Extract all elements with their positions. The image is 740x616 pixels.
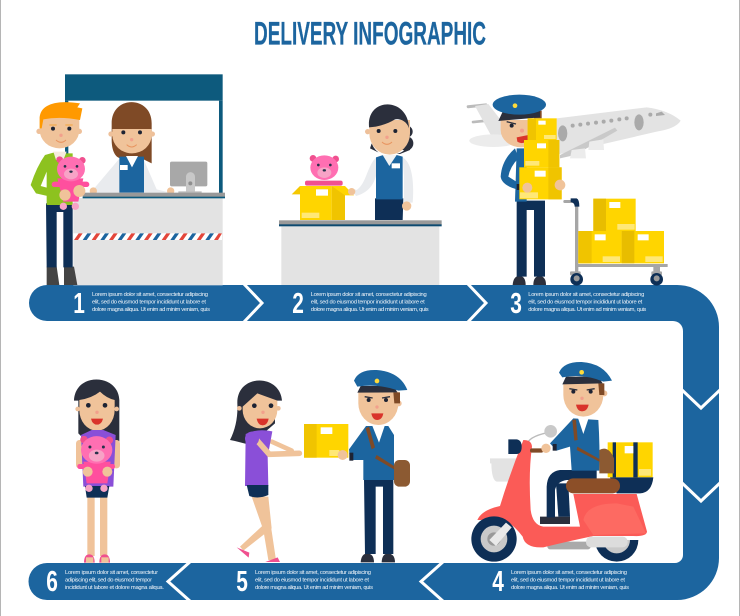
step 6 label: adipiscing elit, sed do eiusmod tempor [65,578,152,584]
step 6 label: incididunt ut labore et dolore magna aliqua. [65,585,164,591]
carried boxes [519,118,565,199]
step 6 label: Lorem ipsum dolor sit amet, consectetur [65,570,158,576]
step 4 label [492,566,629,598]
teddy bear [52,156,89,210]
courier [493,95,546,285]
luggage trolley [563,198,668,286]
teddy bear [77,436,115,492]
step 3 label: elit, sed do eiusmod tempor incididunt ut labore et [528,300,643,306]
step 1 label [73,288,210,320]
front wheel [471,516,517,562]
step 1 label: Lorem ipsum dolor sit amet, consectetur adipiscing [92,292,208,298]
clerk [348,104,413,220]
scene 5: courier handing parcel to woman [230,370,410,562]
step 1 label: elit, sed do eiusmod tempor incididunt ut labore et [92,300,206,306]
step 2 label: elit, sed do eiusmod tempor incididunt ut labore et [311,300,425,306]
woman receiving [230,380,299,562]
airplane [467,103,681,158]
step 5 label: 5 [236,566,248,598]
scene 1: customer at post office counter [31,74,225,285]
step 6 label: 6 [46,566,58,598]
step 4 label: dolore magna aliqua. Ut enim ad minim veniam, quis [511,585,629,591]
step 3 label: 3 [510,288,522,320]
step 4 label: Lorem ipsum dolor sit amet, consectetur adipiscing [511,570,627,576]
basket [490,458,518,482]
scene 4: courier on scooter [471,362,653,562]
step 4 label: elit, sed do eiusmod tempor incididunt ut labore et [511,578,625,584]
monitor [170,162,207,193]
open parcel box [292,186,354,220]
step 6 label [46,566,164,598]
step 5 label: elit, sed do eiusmod tempor incididunt ut labore et [255,578,369,584]
step 2 label: 2 [292,288,304,320]
step 1 label: dolore magna aliqua. Ut enim ad minim veniam, quis [92,307,210,313]
scene 3: courier with boxes and airplane [467,95,681,286]
step 4 label: 4 [492,566,504,598]
scooter mirror [527,425,557,445]
step 3 label: dolore magna aliqua. Ut enim ad minim veniam, quis [528,307,646,313]
step 2 label: Lorem ipsum dolor sit amet, consectetur adipiscing [311,292,427,298]
trolley boxes [578,199,664,263]
customer man [31,102,82,285]
step 2 label: dolore magna aliqua. Ut enim ad minim veniam, quis [311,307,429,313]
step 3 label: Lorem ipsum dolor sit amet, consectetur adipiscing [528,292,644,298]
step 5 label: dolore magna aliqua. Ut enim ad minim veniam, quis [255,585,373,591]
counter [73,193,225,285]
woman [74,379,120,563]
courier giving [338,370,410,562]
scooter seat [566,478,620,493]
teddy bear in box [305,155,343,186]
booth [65,74,223,194]
step 5 label: Lorem ipsum dolor sit amet, consectetur adipiscing [255,570,371,576]
parcel on rack [608,442,653,493]
clerk [90,102,174,195]
step 1 label: 1 [73,288,85,320]
headlight [508,439,522,454]
courier riding [530,362,614,524]
scooter rear wheel [547,540,638,562]
parcel [304,424,348,458]
counter [279,220,442,285]
scene 6: happy woman with teddy bear [74,379,120,563]
scene 2: clerk packing teddy bear [279,104,442,285]
step 5 label [236,566,373,598]
process path band [29,283,721,602]
exhaust [586,537,628,547]
scooter body [477,440,647,547]
step 2 label [292,288,429,320]
step 3 label [510,288,646,320]
title: DELIVERY INFOGRAPHIC [254,16,486,52]
